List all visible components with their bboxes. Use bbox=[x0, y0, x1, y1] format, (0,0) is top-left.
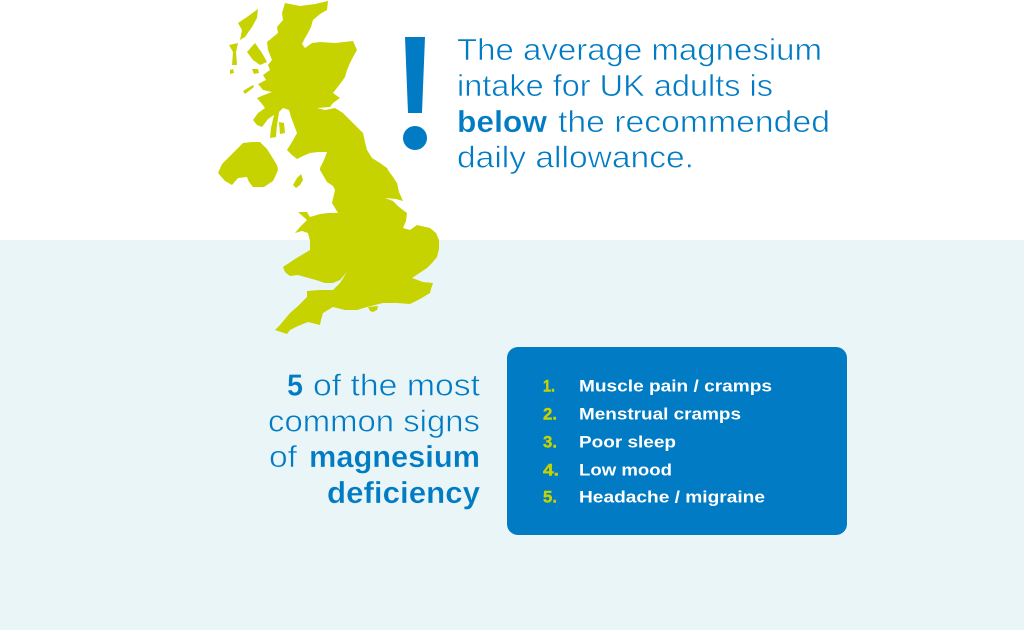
list numbers: 5. bbox=[543, 488, 557, 506]
list items: Menstrual cramps bbox=[579, 404, 741, 424]
Benbecula bbox=[230, 69, 234, 74]
heading: five common signs bbox=[268, 368, 481, 510]
heading: average intake statement: the recommended bbox=[558, 104, 830, 139]
list items: Low mood bbox=[579, 460, 672, 480]
Isle of Man bbox=[293, 174, 303, 188]
heading: average intake statement: The average magnesium bbox=[457, 32, 822, 67]
heading: five common signs: of bbox=[269, 439, 297, 474]
list items: Muscle pain / cramps bbox=[579, 376, 772, 396]
Northern Ireland bbox=[218, 142, 278, 187]
heading: average intake statement bbox=[457, 32, 830, 174]
heading: five common signs: magnesium bbox=[309, 439, 480, 474]
heading: five common signs: of the most bbox=[313, 368, 480, 402]
heading: five common signs: deficiency bbox=[327, 475, 481, 510]
Uists bbox=[229, 43, 238, 65]
heading: average intake statement: daily allowance. bbox=[457, 140, 694, 174]
heading: average intake statement: intake for UK adults is bbox=[457, 68, 773, 103]
Mull bbox=[252, 69, 259, 74]
Coll and Tiree bbox=[243, 85, 254, 94]
list numbers: 4. bbox=[543, 460, 559, 480]
heading: average intake statement: below bbox=[457, 104, 548, 139]
list items: Poor sleep bbox=[579, 432, 676, 452]
list items bbox=[579, 376, 772, 506]
list numbers: 1. bbox=[543, 376, 555, 396]
Isle of Wight bbox=[368, 306, 378, 312]
panel: list of signs bbox=[507, 347, 847, 535]
background: lower tinted band bbox=[0, 240, 1024, 630]
Lewis and Harris bbox=[238, 9, 258, 40]
heading: five common signs: common signs bbox=[268, 404, 480, 438]
list numbers: 3. bbox=[543, 432, 557, 452]
heading: five common signs: 5 bbox=[287, 368, 303, 402]
Great Britain bbox=[253, 1, 439, 334]
map of the UK bbox=[218, 1, 439, 334]
icon: exclamation mark bbox=[403, 37, 427, 150]
Arran bbox=[279, 122, 285, 134]
Skye bbox=[247, 43, 267, 65]
list numbers: 2. bbox=[543, 404, 557, 424]
list numbers bbox=[543, 376, 559, 506]
list items: Headache / migraine bbox=[579, 488, 765, 506]
